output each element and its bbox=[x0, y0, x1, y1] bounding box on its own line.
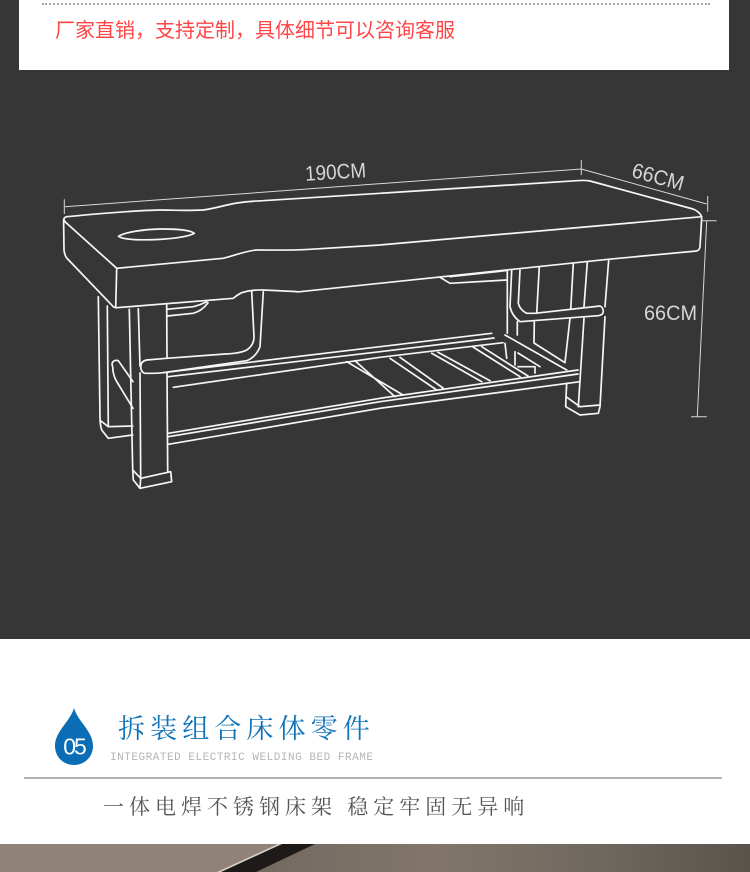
basket end bbox=[505, 343, 540, 373]
label: 66CM width: 66CM bbox=[629, 159, 686, 196]
right legs and L bar bbox=[507, 270, 517, 335]
width dimension bbox=[581, 169, 708, 212]
dimension lines bbox=[64, 160, 717, 417]
lower shelf rails bbox=[168, 370, 580, 444]
bed line drawing bbox=[64, 180, 702, 488]
length dimension bbox=[64, 160, 581, 214]
left short rod bbox=[167, 302, 208, 316]
label: 66CM height: 66CM bbox=[644, 302, 697, 325]
icon: blue water drop with number 05: 05 bbox=[63, 734, 86, 760]
right short rod bbox=[440, 270, 507, 283]
divider rule bbox=[24, 777, 722, 779]
photo strip: product photo top edge bbox=[0, 844, 750, 872]
diagram: massage bed with dimensions bbox=[62, 159, 717, 490]
section heading: 拆装组合床体零件 bbox=[118, 714, 375, 744]
left brace bbox=[112, 360, 133, 408]
icon: blue water drop with number 05 bbox=[55, 708, 93, 765]
front left leg bbox=[129, 309, 172, 488]
body description: 一体电焊不锈钢床架 稳定牢固无异响 bbox=[103, 795, 529, 819]
left L bar bbox=[141, 292, 263, 373]
English subheading: INTEGRATED ELECTRIC WELDING BED FRAME bbox=[110, 752, 373, 764]
mattress side bbox=[64, 218, 702, 308]
upper shelf rails bbox=[163, 333, 503, 387]
label: 190CM: 190CM bbox=[304, 159, 367, 186]
face hole bbox=[118, 229, 194, 240]
rear left leg bbox=[98, 297, 133, 438]
bed top surface bbox=[64, 180, 702, 268]
notice text: 厂家直销，支持定制，具体细节可以咨询客服 bbox=[55, 20, 455, 42]
shelf slats bbox=[347, 347, 528, 397]
panel: top white notice bbox=[19, 0, 729, 70]
height dimension bbox=[691, 221, 717, 417]
dotted divider bbox=[42, 3, 710, 5]
panel: dark dimensions background bbox=[0, 0, 750, 639]
